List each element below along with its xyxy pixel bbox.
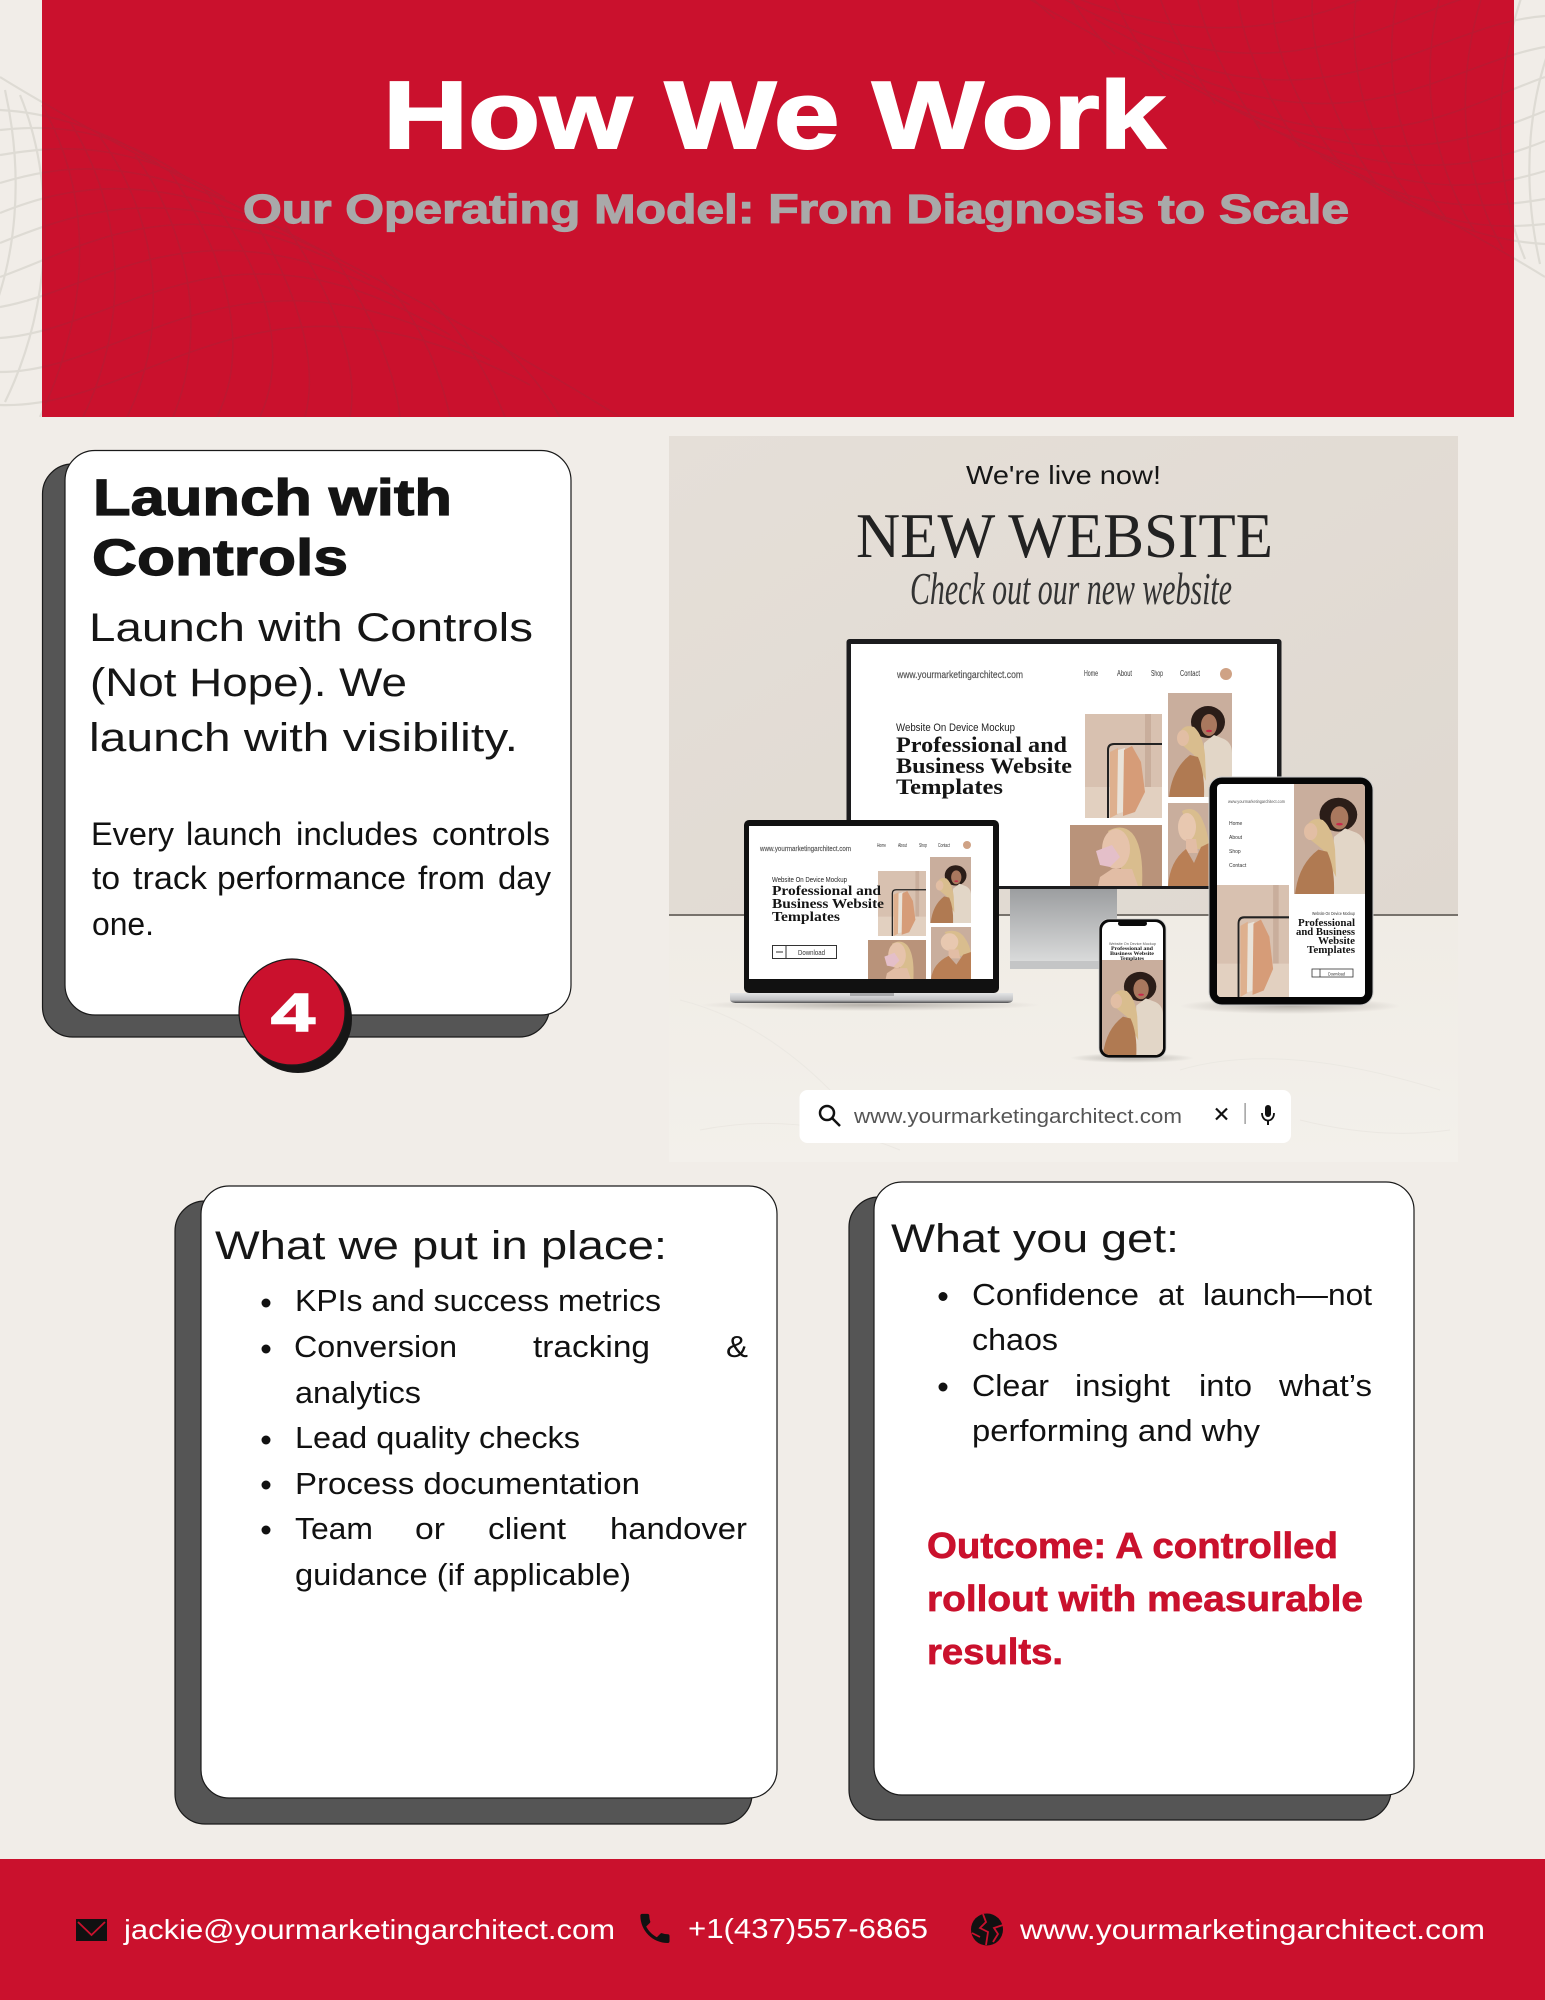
laptop: Download xyxy=(798,948,825,957)
card shadow xyxy=(175,1201,752,1824)
bullet list: at xyxy=(1158,1277,1184,1312)
bullet list: chaos xyxy=(972,1322,1058,1357)
bullet list: launch—not xyxy=(1203,1277,1372,1312)
icon: globe xyxy=(971,1914,1003,1946)
heading: What you get: xyxy=(891,1217,1179,1261)
script tagline: Check out our new website xyxy=(910,563,1232,614)
step number badge xyxy=(239,959,352,1073)
bullet list: Conversion xyxy=(294,1329,457,1364)
phone number: +1(437)557-6865 xyxy=(688,1913,928,1944)
bullet list: into xyxy=(1199,1368,1252,1403)
tablet xyxy=(1195,776,1386,1013)
tablet: Shop xyxy=(1229,849,1241,855)
body text: Every xyxy=(91,816,174,852)
outcome statement: rollout with measurable xyxy=(927,1578,1363,1619)
bullet list: insight xyxy=(1075,1368,1170,1403)
laptop: Professional and xyxy=(772,884,881,899)
tablet: www.yourmarketingarchitect.com xyxy=(1228,799,1285,804)
icon: clear xyxy=(1216,1108,1227,1120)
laptop: Website On Device Mockup xyxy=(772,877,847,884)
intro statement: Launch with Controls xyxy=(89,606,533,650)
heading: What we put in place: xyxy=(215,1224,667,1268)
body text: one. xyxy=(92,906,154,942)
icon: phone xyxy=(640,1914,670,1943)
step number badge: 4 xyxy=(271,983,315,1043)
smartphone: Website On Device Mockup xyxy=(1109,942,1156,946)
website address: www.yourmarketingarchitect.com xyxy=(1019,1914,1485,1945)
tablet: Download xyxy=(1328,972,1345,976)
bullet list: Clear xyxy=(972,1368,1049,1403)
search bar xyxy=(800,1090,1291,1143)
card body xyxy=(874,1182,1414,1795)
bullet list: Lead quality checks xyxy=(295,1420,580,1455)
icon: email xyxy=(76,1919,107,1941)
bullet list: Team xyxy=(295,1511,373,1546)
bullet list: tracking xyxy=(533,1329,650,1364)
body text: controls xyxy=(432,816,550,852)
intro statement: launch with visibility. xyxy=(89,716,518,760)
intro statement xyxy=(89,606,533,760)
tablet: Website xyxy=(1318,936,1356,947)
wall and floor xyxy=(669,436,1458,915)
monitor: Home xyxy=(1084,669,1098,678)
bullet list: KPIs and success metrics xyxy=(295,1283,661,1318)
footer band xyxy=(0,1859,1545,2000)
bullet list: client xyxy=(488,1511,566,1546)
body text: to xyxy=(92,860,120,896)
headline: new website: NEW WEBSITE xyxy=(856,500,1273,571)
monitor: Website On Device Mockup xyxy=(896,722,1015,734)
tablet: and Business xyxy=(1296,927,1355,938)
subtitle: Our Operating Model: From Diagnosis to Scale xyxy=(243,186,1349,232)
bullet list: guidance (if applicable) xyxy=(295,1557,631,1592)
monitor: Contact xyxy=(1180,669,1201,678)
body text xyxy=(91,816,551,942)
card shadow xyxy=(42,464,550,1037)
body text: launch xyxy=(186,816,282,852)
tablet: Website On Device Mockup xyxy=(1312,911,1355,916)
panel: what you get xyxy=(849,1182,1414,1820)
laptop xyxy=(700,820,1040,1011)
monitor: Professional and xyxy=(896,732,1067,757)
smartphone: Business Website xyxy=(1110,952,1155,957)
bullet list: Process documentation xyxy=(295,1466,640,1501)
laptop: Business Website xyxy=(772,897,884,912)
outcome statement: Outcome: A controlled xyxy=(927,1525,1338,1566)
monitor: About xyxy=(1117,669,1133,678)
tablet: Templates xyxy=(1307,945,1355,956)
laptop: Shop xyxy=(919,843,927,849)
laptop: Contact xyxy=(938,843,950,849)
tablet: Home xyxy=(1229,821,1243,827)
icon: search xyxy=(820,1106,840,1126)
panel: what we put in place xyxy=(175,1186,777,1824)
bullet list xyxy=(262,1283,748,1592)
monitor: Business Website xyxy=(896,753,1072,778)
smartphone: Professional and xyxy=(1111,947,1153,952)
body text: includes xyxy=(296,816,418,852)
outcome statement: results. xyxy=(927,1631,1063,1672)
laptop: About xyxy=(898,843,907,849)
title: How We Work xyxy=(383,62,1166,169)
card shadow xyxy=(849,1197,1391,1820)
bullet list xyxy=(938,1277,1372,1448)
bullet list: Confidence xyxy=(972,1277,1139,1312)
bullet list: performing and why xyxy=(972,1413,1261,1448)
panel: launch with controls xyxy=(42,450,571,1073)
search bar: www.yourmarketingarchitect.com xyxy=(853,1106,1182,1128)
body text: day xyxy=(498,860,551,896)
smartphone xyxy=(1078,918,1186,1062)
body text: from xyxy=(418,860,485,896)
tablet: Contact xyxy=(1229,863,1247,869)
card body xyxy=(201,1186,777,1798)
intro statement: (Not Hope). We xyxy=(90,661,407,705)
tablet: Professional xyxy=(1298,918,1355,929)
tablet: About xyxy=(1229,835,1243,841)
website mockup image xyxy=(669,436,1458,1162)
outcome statement xyxy=(927,1525,1363,1672)
monitor: www.yourmarketingarchitect.com xyxy=(896,670,1023,681)
heading: Controls xyxy=(92,529,348,586)
monitor: Templates xyxy=(896,774,1003,799)
monitor: Shop xyxy=(1151,669,1163,678)
bullet list: what’s xyxy=(1278,1368,1372,1403)
laptop: Home xyxy=(877,843,886,849)
headline: we're live now: We're live now! xyxy=(966,460,1161,490)
bullet list: analytics xyxy=(295,1375,421,1410)
card body xyxy=(65,450,571,1015)
icon: microphone xyxy=(1262,1105,1274,1125)
monitor xyxy=(846,639,1282,969)
heading: Launch with xyxy=(93,469,452,526)
bullet list: handover xyxy=(610,1511,747,1546)
heading xyxy=(92,469,452,586)
bullet list: or xyxy=(415,1511,445,1546)
laptop: Templates xyxy=(772,910,841,925)
body text: performance xyxy=(217,860,406,896)
smartphone: Templates xyxy=(1120,957,1144,962)
email address: jackie@yourmarketingarchitect.com xyxy=(123,1914,615,1945)
laptop: www.yourmarketingarchitect.com xyxy=(759,846,851,853)
body text: track xyxy=(133,860,208,896)
header band xyxy=(42,0,1514,417)
bullet list: & xyxy=(726,1329,748,1364)
